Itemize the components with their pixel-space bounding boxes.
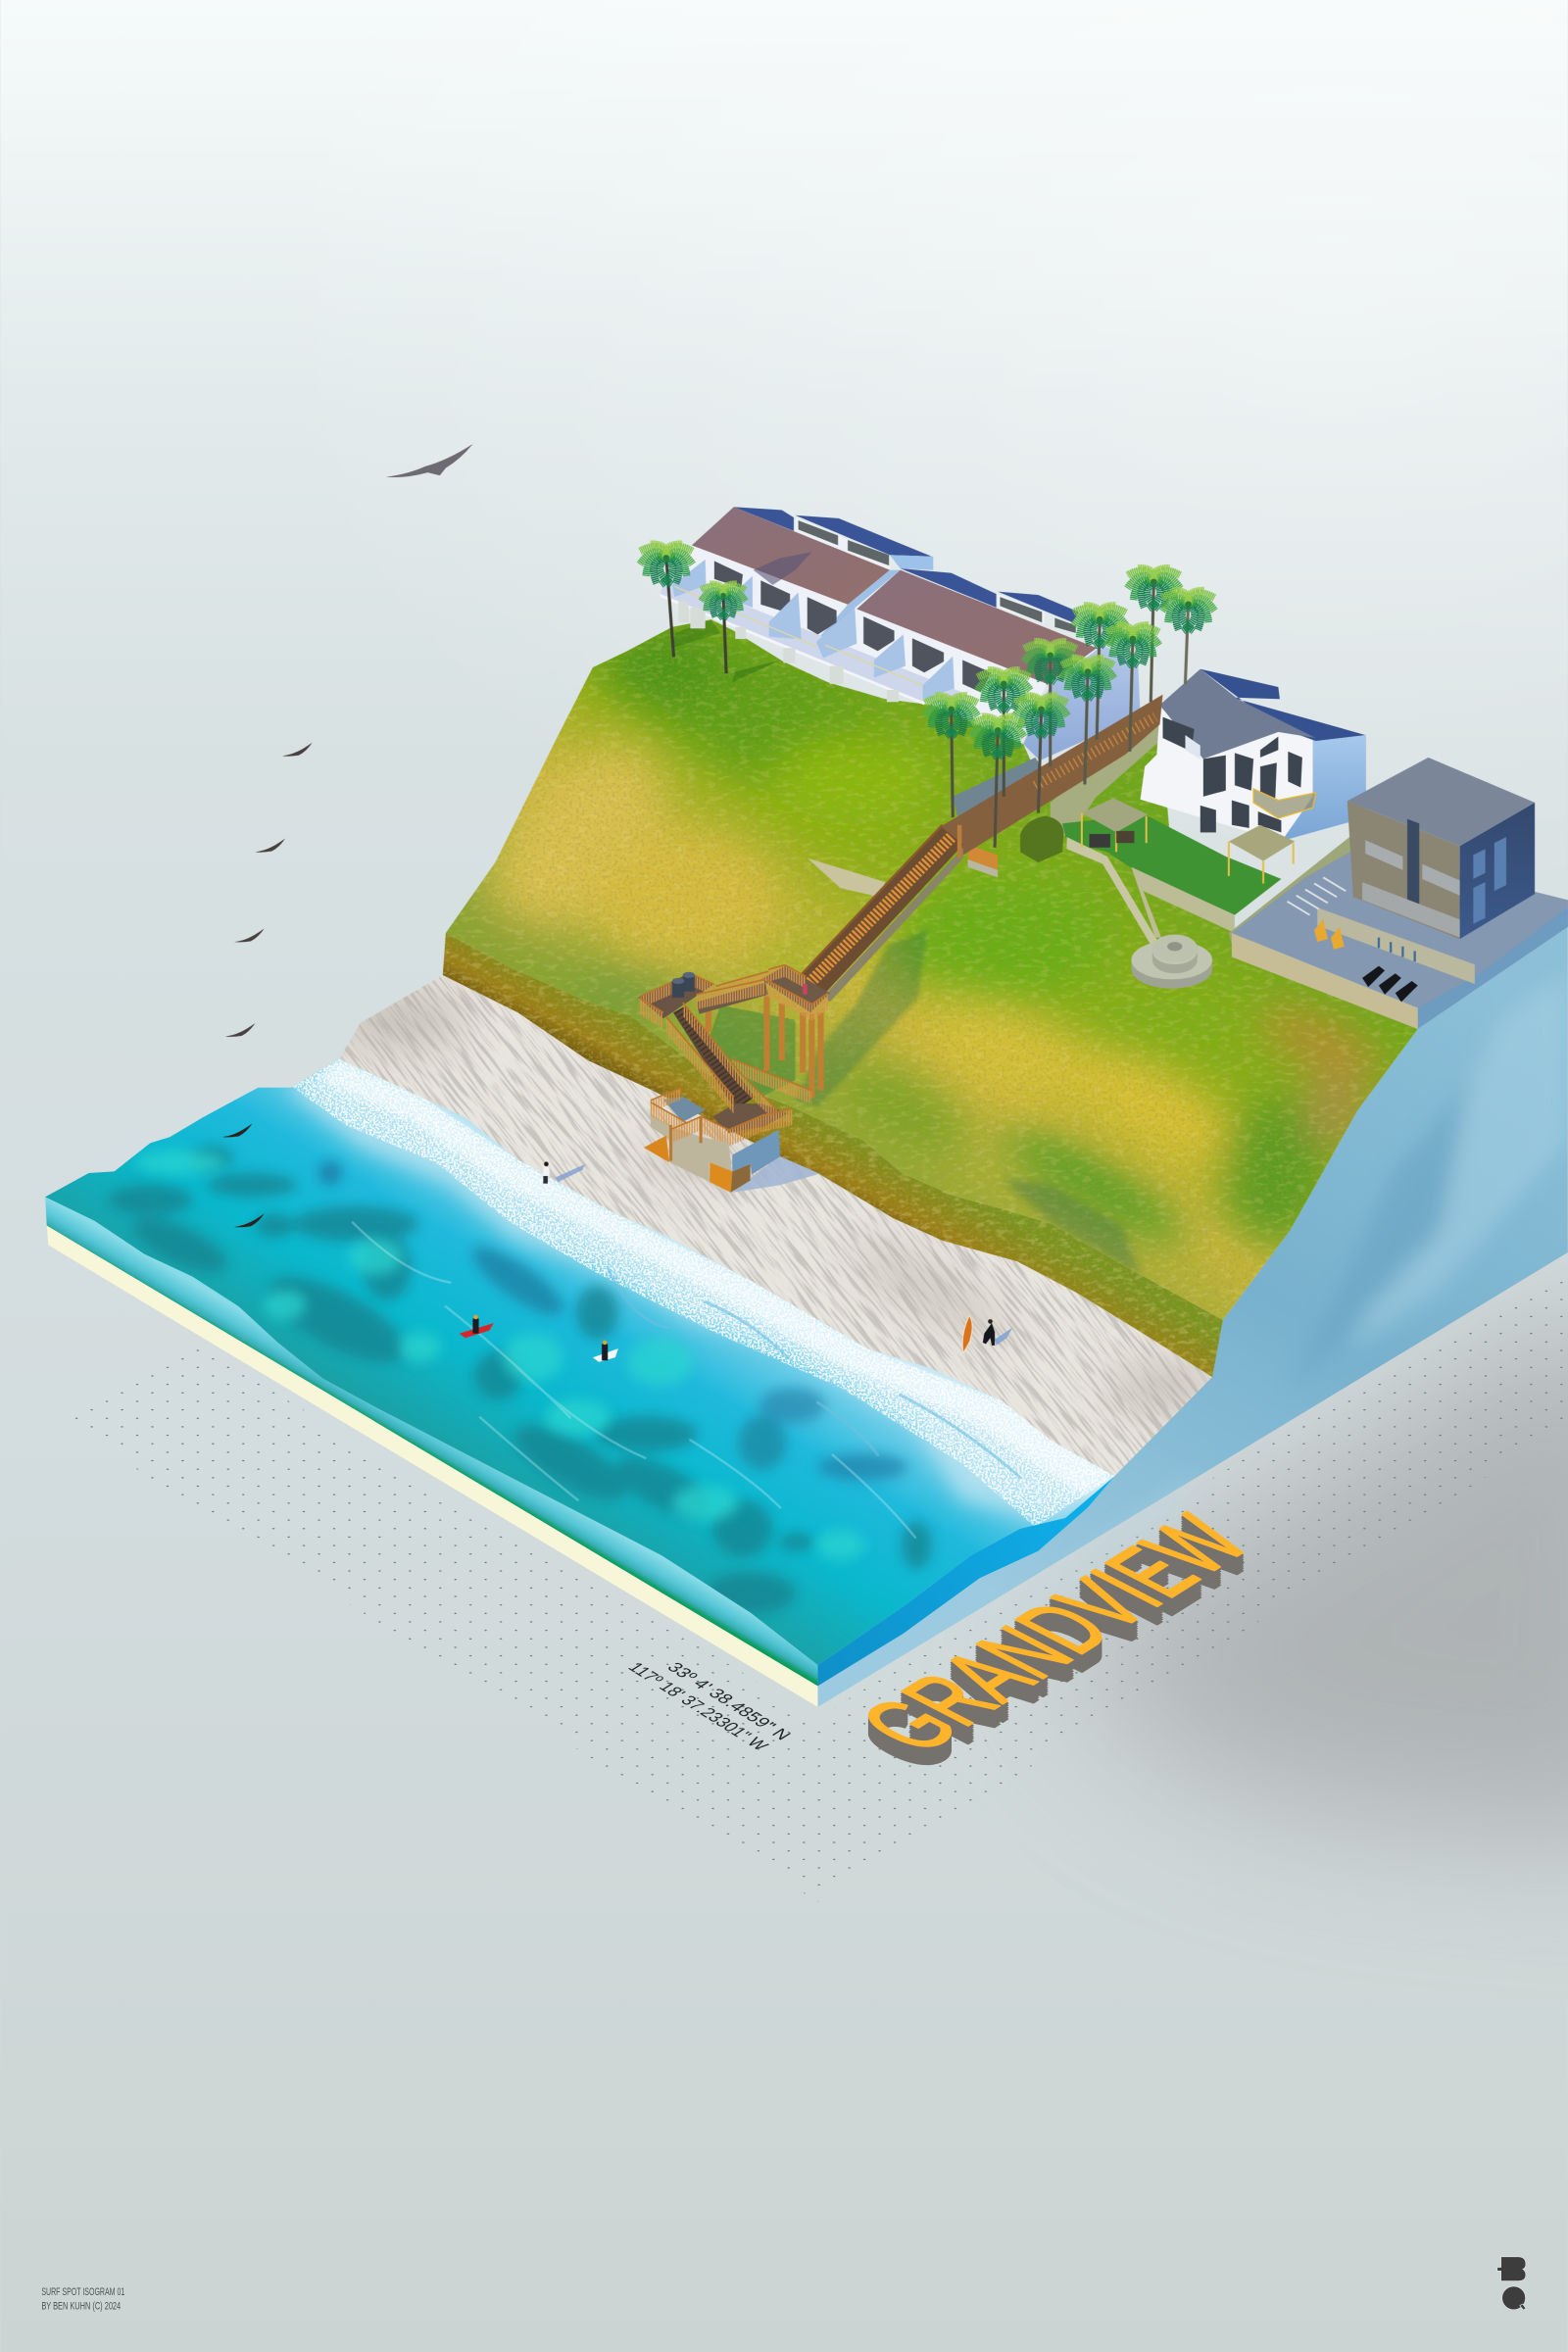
building shadow on sand bbox=[732, 1155, 822, 1193]
front fences bbox=[639, 979, 828, 1147]
birds bbox=[222, 444, 472, 1227]
flight of steps bbox=[673, 1005, 755, 1110]
gable connector bbox=[816, 570, 901, 660]
garden gazebos bbox=[1082, 798, 1295, 884]
decks bbox=[760, 966, 830, 1012]
balcony fins bbox=[672, 560, 955, 699]
surfers and people bbox=[460, 1161, 1012, 1362]
deck supports bbox=[678, 602, 899, 702]
water blue side band bbox=[817, 1476, 1115, 1686]
standing beachgoer bbox=[543, 1161, 585, 1184]
credit text: SURF SPOT ISOGRAM 01 bbox=[41, 2286, 124, 2298]
right lobe bbox=[901, 871, 1110, 1004]
hedge bbox=[1020, 816, 1063, 862]
yellow dry slope bbox=[462, 719, 694, 961]
surfer on red board bbox=[460, 1315, 494, 1338]
lower cross railing bbox=[732, 1059, 811, 1104]
beach access building bbox=[644, 1088, 780, 1193]
long wooden stairway bbox=[795, 695, 1162, 1002]
lower deck bbox=[712, 1103, 788, 1133]
terrain block: cliff side face bbox=[817, 927, 1568, 1707]
yellow balcony bbox=[1253, 789, 1316, 818]
coordinates text: 33º 4' 38.4859" N bbox=[662, 1660, 795, 1743]
palm shadow on roof bbox=[754, 552, 811, 585]
concrete terrace bbox=[1232, 848, 1568, 1029]
rear fences bbox=[641, 965, 806, 1008]
credit text bbox=[41, 2286, 124, 2312]
light sandbars bbox=[135, 1151, 864, 1560]
dormer chimney bbox=[1185, 735, 1200, 759]
sand beach bbox=[222, 444, 1568, 1476]
coordinates text: 117º 18' 37.23301" W bbox=[623, 1660, 772, 1753]
surfer on white board bbox=[593, 1341, 618, 1362]
townhouse row bbox=[661, 507, 1141, 760]
facade bbox=[661, 545, 1097, 735]
retaining walls and garden bbox=[953, 712, 1353, 957]
pillars bbox=[706, 996, 824, 1098]
end wall bbox=[1023, 644, 1141, 760]
white modern house bbox=[1141, 669, 1366, 842]
railing bbox=[674, 586, 923, 685]
water tanks bbox=[672, 972, 695, 998]
water front face bbox=[45, 1197, 817, 1686]
top rails bbox=[639, 965, 828, 1130]
wave swell lines bbox=[353, 1222, 915, 1538]
patio furniture bbox=[1314, 919, 1418, 1002]
vertical dark strip bbox=[1407, 819, 1419, 909]
lower run bbox=[795, 826, 963, 993]
grassy cliff hill bbox=[445, 619, 1418, 1320]
dotted isometric floor grid bbox=[74, 1282, 1563, 1902]
upper run bbox=[941, 695, 1162, 855]
palm trees bbox=[640, 538, 1214, 848]
round fire pit structure bbox=[1131, 935, 1212, 989]
side windows bbox=[1473, 837, 1506, 924]
credit text: BY BEN KUHN (C) 2024 bbox=[41, 2300, 121, 2312]
balcony deck bbox=[661, 574, 968, 705]
foam wash bbox=[285, 1059, 1115, 1523]
deck edge bbox=[661, 594, 924, 705]
orange surfboard bbox=[962, 1315, 972, 1353]
terrace steps bbox=[1288, 877, 1346, 915]
apartment balconies bbox=[1365, 840, 1402, 870]
planter bbox=[968, 845, 998, 870]
rear blue roofs bbox=[734, 507, 794, 531]
green crown bbox=[643, 619, 915, 802]
building fences bbox=[651, 1088, 701, 1144]
lower stair tower bbox=[638, 965, 830, 1147]
garden walls bbox=[1067, 837, 1158, 945]
tan patch on grass bbox=[808, 858, 885, 897]
house windows bbox=[1162, 717, 1302, 832]
cream base layer bbox=[47, 1226, 817, 1707]
ocean surface bbox=[45, 1059, 1115, 1665]
palm trunks bbox=[666, 558, 1188, 848]
person on deck bbox=[803, 984, 808, 995]
reef patches bbox=[108, 1146, 932, 1614]
surfer with shadow bbox=[983, 1319, 1012, 1346]
flock of gulls bbox=[222, 743, 313, 1227]
mauve roofs bbox=[692, 507, 890, 605]
large pelican in flight bbox=[386, 444, 472, 477]
unit windows bbox=[714, 561, 991, 692]
lawn bbox=[1062, 814, 1281, 915]
dark apartment building bbox=[1348, 758, 1535, 939]
dormers bbox=[795, 517, 890, 570]
cast shadows on grass bbox=[795, 930, 927, 1107]
title: GRANDVIEW: GRANDVIEW bbox=[835, 1501, 1275, 1766]
icon: BQ logo mark bbox=[1497, 2257, 1526, 2310]
palm crowns bbox=[640, 538, 1214, 757]
dune band at cliff foot bbox=[443, 933, 1223, 1378]
